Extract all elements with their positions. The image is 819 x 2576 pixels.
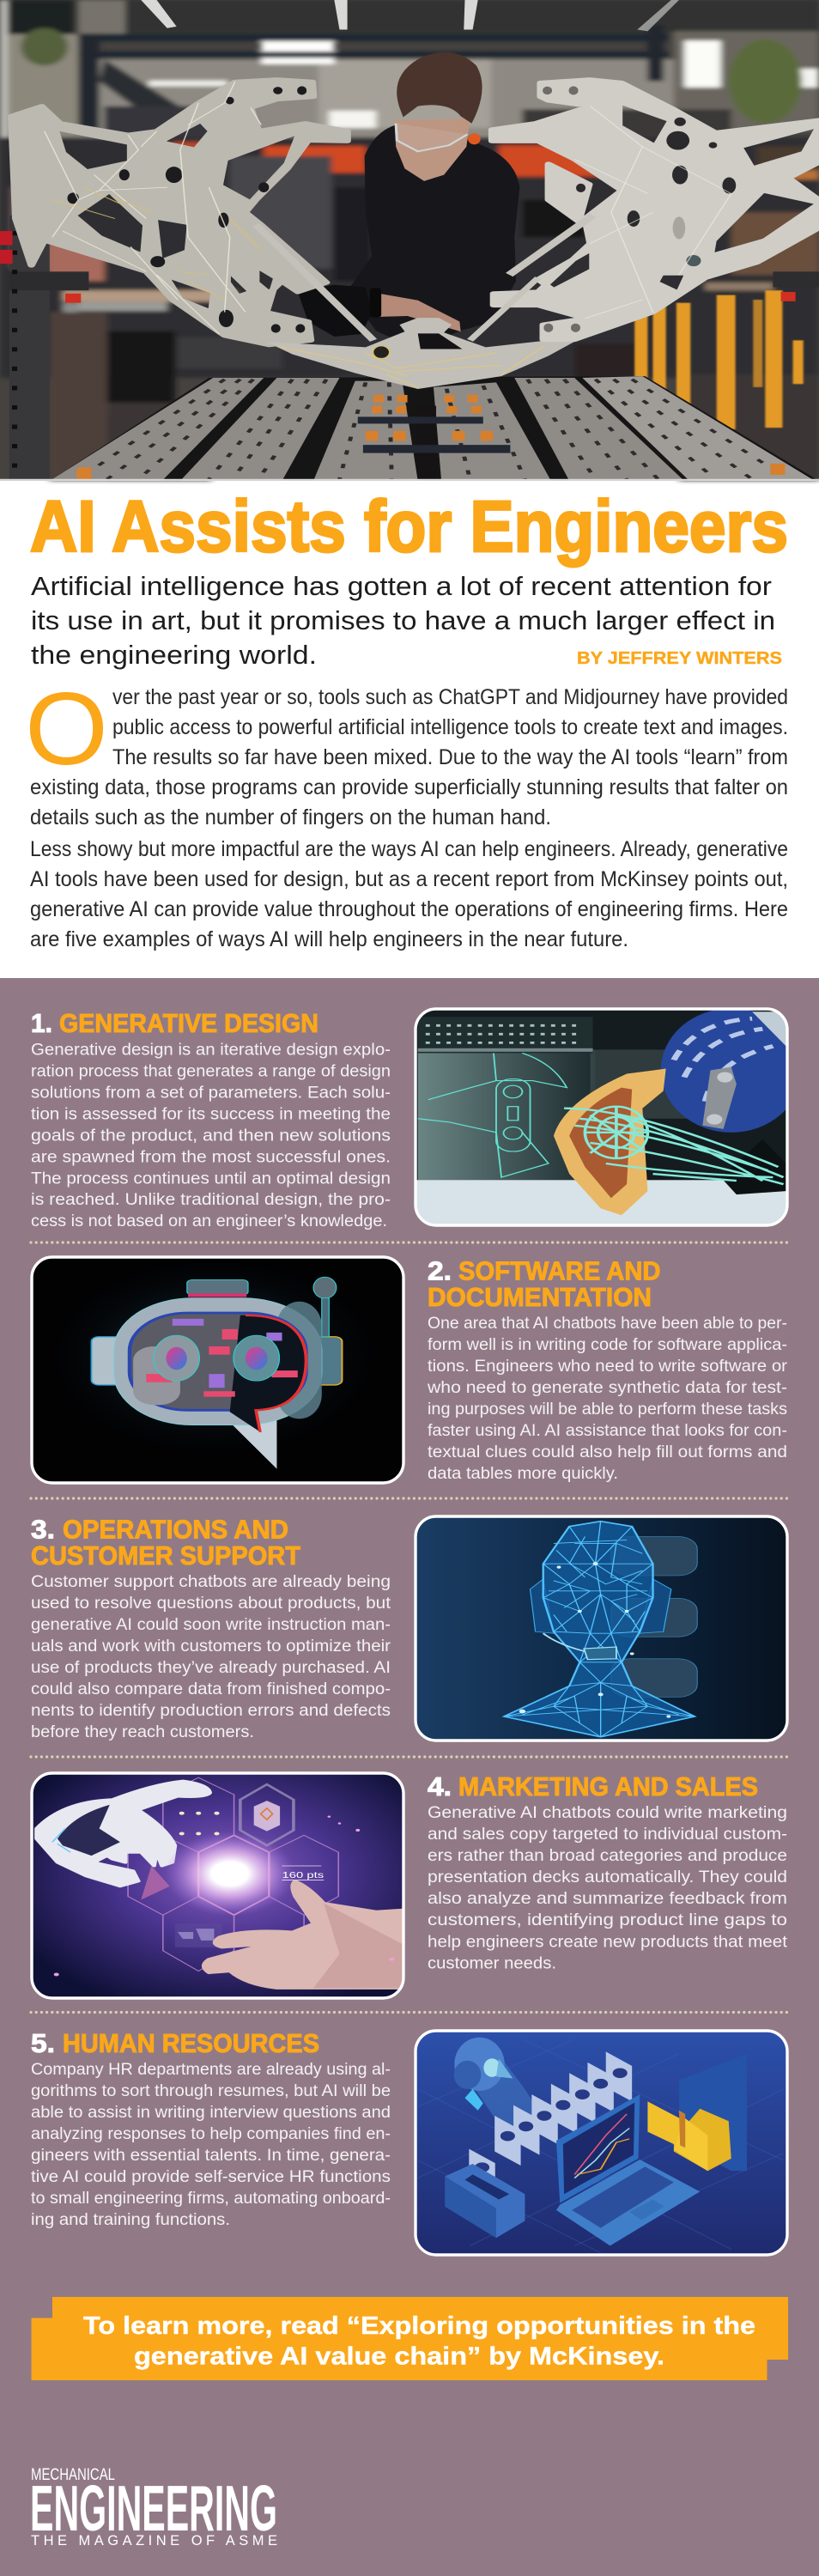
section 2: software and documentation (26, 1253, 788, 1486)
body 4: help engineers create new products that meet (428, 1934, 788, 1951)
intro text: details such as the number of fingers on the human hand. (30, 805, 551, 829)
body 4: customers, identifying product line gaps to (428, 1911, 787, 1929)
callout banner: generative AI value chain” by McKinsey. (134, 2342, 664, 2370)
body 5: to small engineering firms, automating onboard- (31, 2190, 391, 2208)
body 5: tive AI could provide self-service HR functions (31, 2168, 391, 2186)
image 3: wireframe head (413, 1515, 789, 1742)
logo: Mechanical Engineering: MECHANICAL (31, 2465, 115, 2484)
orange posts (634, 288, 804, 429)
body 1: Generative design is an iterative design explo- (31, 1041, 391, 1059)
body 1: is reached. Unlike traditional design, the pro- (31, 1191, 391, 1209)
heading 3 (31, 1515, 300, 1571)
body 2: ing purposes will be able to perform these tasks (428, 1400, 787, 1419)
callout banner: To learn more, read “Exploring opportunities in the (83, 2312, 755, 2340)
image 2: chatbot robot (26, 1253, 408, 1486)
intro text (30, 685, 788, 951)
section 3: operations and customer support (31, 1515, 789, 1742)
body 3: used to resolve questions about products, but (31, 1595, 391, 1613)
image 4: robot and human hands (26, 1771, 408, 2002)
body 1: goals of the product, and then new solutions (31, 1127, 391, 1145)
logo: Mechanical Engineering: THE MAGAZINE OF ASME (31, 2533, 277, 2549)
intro text: existing data, those programs can provide superficially stunning results that falter on (30, 775, 788, 799)
body 2: who need to generate synthetic data for test- (427, 1379, 787, 1397)
body 1 (31, 1041, 391, 1230)
body 5: ing and training functions. (31, 2211, 230, 2229)
divider 1 (31, 1241, 788, 1244)
right generative frame (492, 80, 819, 340)
body 3: generative AI could soon write instruction man- (31, 1616, 391, 1634)
body 3 (31, 1573, 391, 1741)
body 4: ers rather than broad categories and produce (428, 1847, 787, 1865)
purple content panel (0, 978, 819, 2576)
body 2: textual clues could also help fill out forms and (428, 1443, 787, 1461)
body 2: form well is in writing code for software applica- (428, 1336, 787, 1354)
body 1: ration process that generates a range of design (31, 1062, 391, 1080)
intro text: generative AI can provide value throughout the operations of engineering firms. Here (30, 897, 788, 921)
byline: BY JEFFREY WINTERS (577, 649, 782, 668)
body 2: data tables more quickly. (428, 1465, 618, 1483)
logo: Mechanical Engineering (30, 2465, 277, 2549)
intro text: AI tools have been used for design, but as a recent report from McKinsey points out, (30, 867, 788, 891)
intro text: are five examples of ways AI will help engineers in the near future. (30, 927, 628, 951)
body 2: One area that AI chatbots have been able to per- (428, 1315, 787, 1333)
robot (476, 2063, 532, 2126)
section 1: generative design (31, 1008, 802, 1230)
body 3: uals and work with customers to optimize their (31, 1637, 391, 1656)
section 4: marketing and sales (26, 1771, 788, 2002)
hero photo: engineer with generative-design frame (0, 0, 819, 481)
on-screen score label: 160 pts (282, 1870, 325, 1880)
body 1: solutions from a set of parameters. Each solu- (31, 1084, 391, 1102)
heading 2: DOCUMENTATION (428, 1282, 652, 1312)
resumes (469, 2052, 632, 2178)
body 2: faster using AI. AI assistance that looks for con- (428, 1422, 787, 1440)
heading 4: 4. (428, 1771, 452, 1801)
body 4 (428, 1804, 788, 1973)
yellow wheel (554, 1069, 666, 1215)
body 5 (31, 2061, 391, 2229)
heading 2: 2. (428, 1255, 452, 1286)
body 3: Customer support chatbots are already being (31, 1573, 391, 1591)
deck: Artificial intelligence has gotten a lot of recent attention for (31, 571, 772, 601)
body 1: are spawned from the most successful ones. (31, 1148, 391, 1166)
heading 1: GENERATIVE DESIGN (59, 1008, 318, 1038)
folders (674, 2109, 731, 2171)
heading 3: CUSTOMER SUPPORT (31, 1540, 300, 1571)
body 5: Company HR departments are already using al- (31, 2061, 391, 2079)
divider 2 (31, 1497, 788, 1500)
body 4: also analyze and summarize feedback from (428, 1890, 787, 1908)
body 2 (427, 1315, 788, 1483)
body 5: analyzing responses to help companies find en- (31, 2125, 391, 2143)
lower yoke (266, 318, 579, 389)
heading 5: HUMAN RESOURCES (63, 2028, 319, 2058)
heading 3: OPERATIONS AND (63, 1515, 288, 1544)
body 3: could also compare data from finished compo- (31, 1680, 391, 1698)
section 5: human resources (31, 2028, 789, 2257)
left post (9, 216, 50, 481)
body 4: customer needs. (428, 1954, 556, 1973)
body 5: gineers with essential talents. In time, genera- (31, 2147, 391, 2165)
body 1: The process continues until an optimal design (31, 1170, 391, 1188)
divider 3 (31, 1755, 788, 1759)
body 3: nents to identify production errors and defects (31, 1702, 391, 1720)
body 1: tion is assessed for its success in meeting the (31, 1105, 391, 1123)
divider 4 (31, 2011, 788, 2014)
image 1: CAD wheel (413, 1008, 802, 1229)
laptop (556, 2094, 640, 2203)
left generative frame (11, 80, 348, 345)
logo: Mechanical Engineering: ENGINEERING (30, 2472, 277, 2544)
image 5: AI screening resumes on laptop (413, 2028, 789, 2257)
body 5: able to assist in writing interview questions and (31, 2104, 391, 2122)
heading 2 (428, 1255, 661, 1312)
body 4: and sales copy targeted to individual custom- (428, 1826, 787, 1844)
body 3: before they reach customers. (31, 1723, 254, 1741)
body 3: use of products they’ve already purchased. AI (31, 1659, 391, 1677)
human hand (203, 1881, 402, 1988)
heading 4: MARKETING AND SALES (458, 1771, 758, 1801)
deck: the engineering world. (31, 640, 317, 670)
strut (256, 225, 373, 340)
body 2: tions. Engineers who need to write software or (428, 1358, 788, 1376)
table plates (50, 376, 819, 481)
robot hand (37, 1781, 210, 1886)
heading 1: 1. (31, 1008, 52, 1038)
shaft (721, 1139, 786, 1194)
person (351, 124, 519, 349)
body 5: gorithms to sort through resumes, but AI will be (31, 2082, 391, 2100)
drop cap: O (25, 671, 108, 787)
callout banner (31, 2297, 788, 2380)
heading 5: 5. (31, 2028, 55, 2058)
heading 3: 3. (31, 1515, 55, 1544)
deck: its use in art, but it promises to have a much larger effect in (31, 605, 775, 635)
heading 2: SOFTWARE AND (458, 1255, 661, 1286)
intro text: The results so far have been mixed. Due to the way the AI tools “learn” from (112, 745, 788, 769)
body 4: presentation decks automatically. They could (428, 1868, 787, 1886)
body 1: cess is not based on an engineer’s knowledge. (31, 1212, 387, 1230)
ballot box (445, 2164, 525, 2238)
deck (31, 571, 775, 670)
blue wheel (661, 1010, 786, 1133)
body 4: Generative AI chatbots could write marketing (428, 1804, 787, 1822)
